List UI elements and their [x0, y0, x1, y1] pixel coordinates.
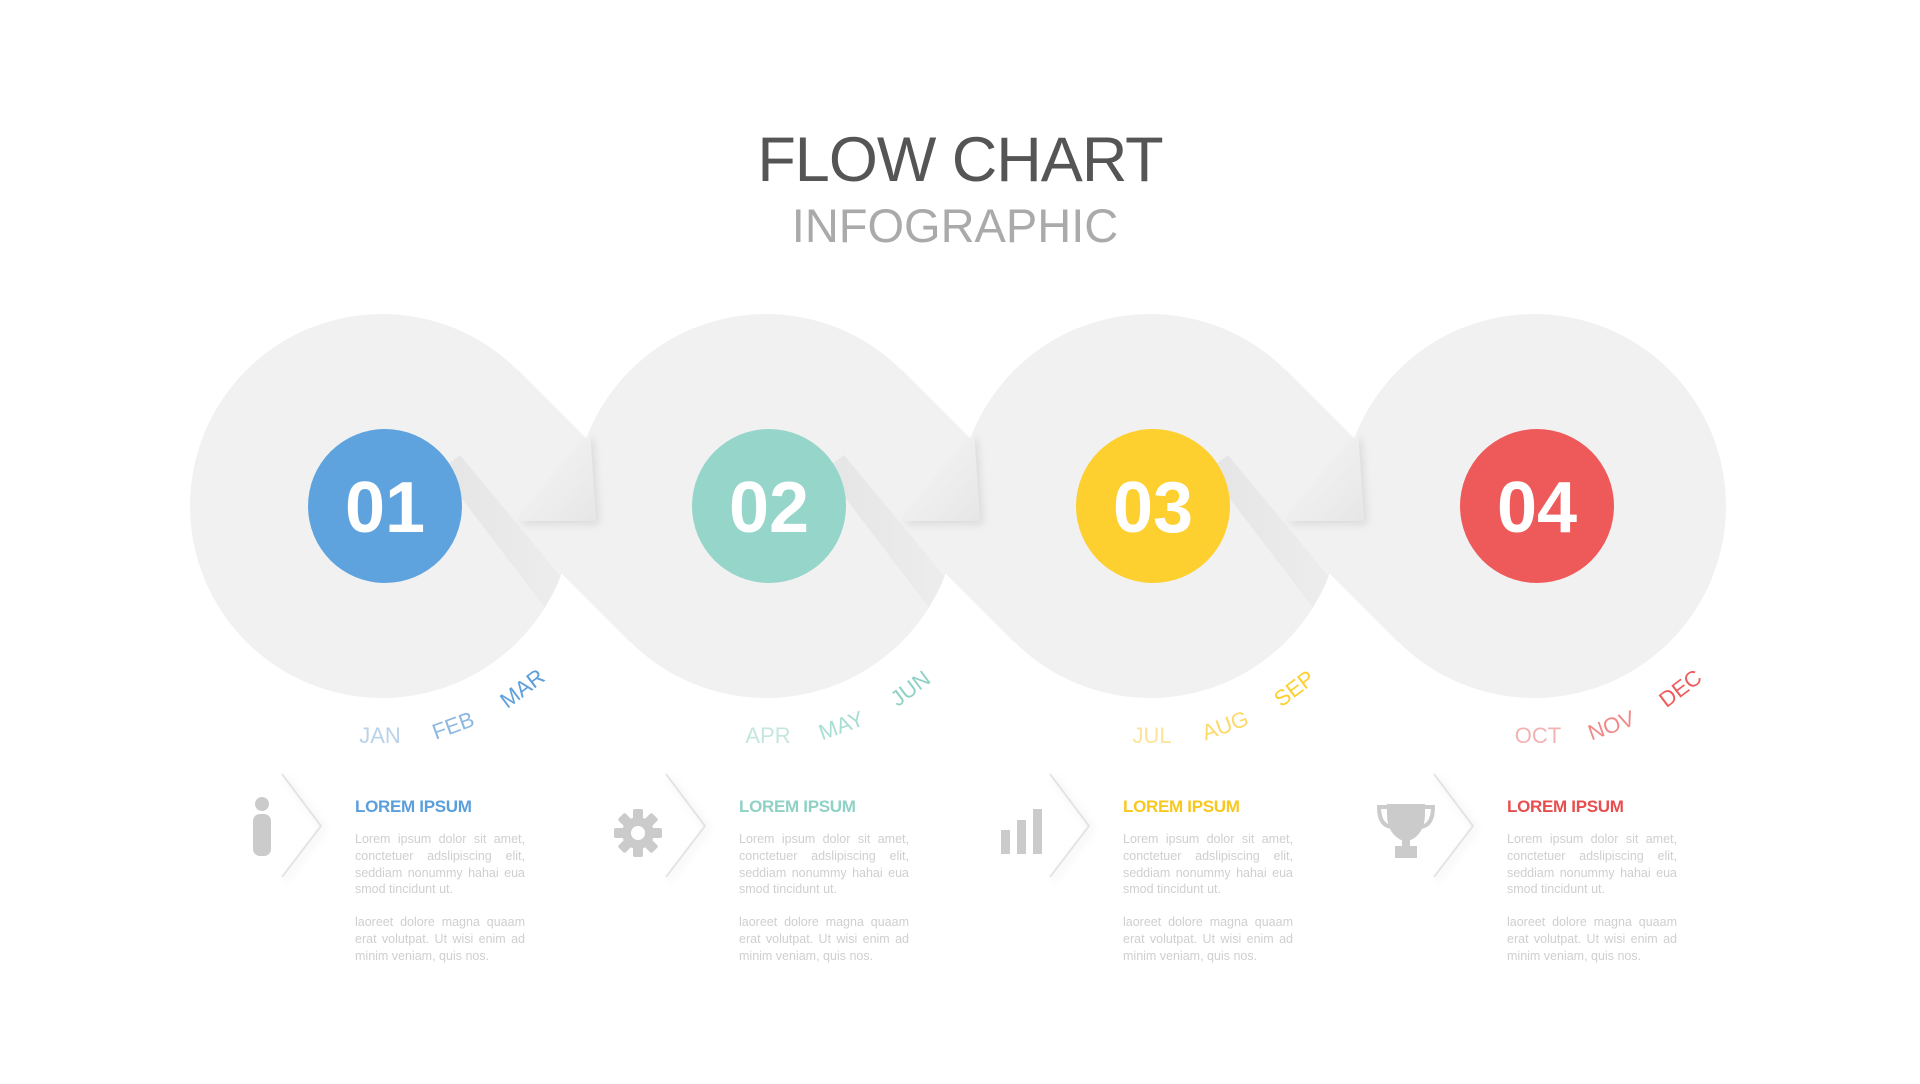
- months: JUN: [886, 666, 935, 711]
- text block 03: [1123, 797, 1293, 963]
- months: AUG: [1198, 706, 1252, 745]
- text block 03: laoreet dolore magna quaam erat volutpat. Ut wisi enim ad minim veniam, quis nos.: [1123, 915, 1293, 963]
- months: OCT: [1515, 723, 1561, 748]
- text block 02: [739, 797, 909, 963]
- months: DEC: [1654, 664, 1706, 712]
- title: INFOGRAPHIC: [792, 199, 1118, 252]
- step 03 badge: [1076, 429, 1230, 583]
- icon: trophy: [1379, 804, 1433, 858]
- months: JUL: [1132, 723, 1172, 748]
- title: FLOW CHART: [757, 125, 1163, 195]
- text block 04: [1507, 797, 1677, 963]
- text block 04: LOREM IPSUM: [1507, 797, 1624, 816]
- step 02 badge: [692, 429, 846, 583]
- months: APR: [745, 723, 791, 748]
- text block 01: [355, 797, 525, 963]
- months: MAR: [495, 664, 549, 713]
- text block 03: LOREM IPSUM: [1123, 797, 1240, 816]
- text block 02: Lorem ipsum dolor sit amet, conctetuer adslipiscing elit, seddiam nonummy hahai eua smod tincidunt ut.: [739, 832, 909, 896]
- title: [757, 125, 1163, 252]
- step 01 badge: 01: [345, 468, 425, 548]
- text block 04: laoreet dolore magna quaam erat volutpat. Ut wisi enim ad minim veniam, quis nos.: [1507, 915, 1677, 963]
- step 04 badge: 04: [1497, 468, 1577, 548]
- chevrons: [282, 774, 1473, 877]
- step 04 badge: [1460, 429, 1614, 583]
- icon: bar chart: [1001, 809, 1042, 854]
- months: [359, 664, 1706, 748]
- icon: gear: [614, 809, 662, 857]
- text block 02: laoreet dolore magna quaam erat volutpat. Ut wisi enim ad minim veniam, quis nos.: [739, 915, 909, 963]
- months: SEP: [1269, 665, 1319, 712]
- step 02 badge: 02: [729, 468, 809, 548]
- step 03 badge: 03: [1113, 468, 1193, 548]
- text block 01: laoreet dolore magna quaam erat volutpat. Ut wisi enim ad minim veniam, quis nos.: [355, 915, 525, 963]
- text block 01: Lorem ipsum dolor sit amet, conctetuer adslipiscing elit, seddiam nonummy hahai eua smod tincidunt ut.: [355, 832, 525, 896]
- text block 02: LOREM IPSUM: [739, 797, 856, 816]
- flow diagram: [190, 314, 1726, 878]
- ribbon shadows: [450, 456, 1264, 542]
- icon: person: [253, 797, 271, 856]
- text block 01: LOREM IPSUM: [355, 797, 472, 816]
- months: FEB: [429, 706, 478, 745]
- ribbon folds: [517, 433, 1364, 521]
- months: NOV: [1584, 705, 1638, 745]
- months: JAN: [359, 723, 401, 748]
- months: MAY: [815, 706, 867, 745]
- step 01 badge: [308, 429, 462, 583]
- text block 03: Lorem ipsum dolor sit amet, conctetuer adslipiscing elit, seddiam nonummy hahai eua smod tincidunt ut.: [1123, 832, 1293, 896]
- text block 04: Lorem ipsum dolor sit amet, conctetuer adslipiscing elit, seddiam nonummy hahai eua smod tincidunt ut.: [1507, 832, 1677, 896]
